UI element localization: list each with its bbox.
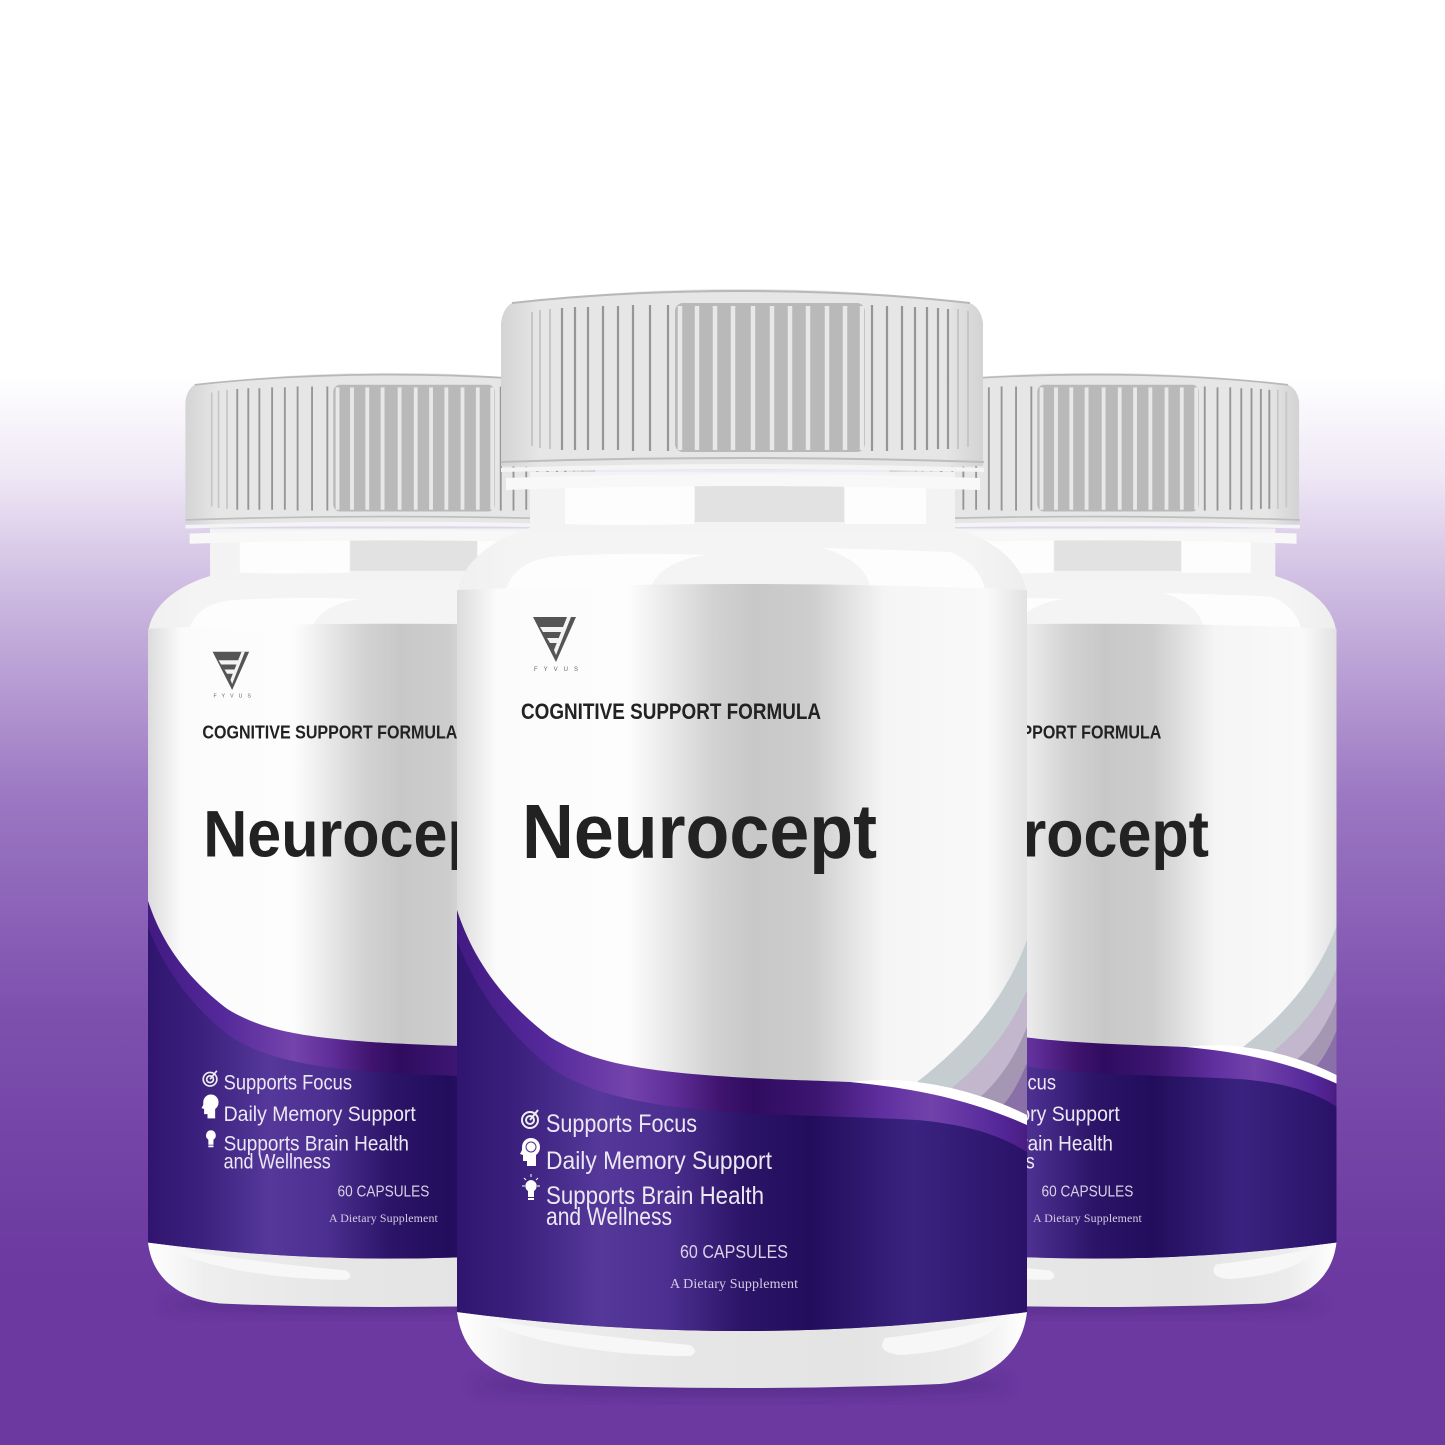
left subtitle: COGNITIVE SUPPORT FORMULA — [202, 721, 457, 742]
left shoulder highlight — [190, 593, 597, 628]
left benefits: and Wellness — [224, 1149, 331, 1173]
benefit: wellness: and Wellness — [546, 1203, 672, 1231]
icon: target — [522, 1110, 538, 1128]
left bottle label — [148, 624, 457, 1259]
right bottle neck — [894, 528, 1297, 579]
benefit: brain health: Supports Brain Health — [546, 1182, 764, 1210]
right capsule count: 60 CAPSULES — [1042, 1184, 1133, 1201]
right bottle — [852, 373, 1336, 1312]
center bottle base — [457, 1305, 1027, 1388]
white swoosh line — [852, 1080, 1027, 1125]
left benefits: Supports Focus — [224, 1070, 352, 1094]
right bottle cap — [889, 373, 1300, 528]
center bottle — [457, 289, 1027, 1394]
supplement note: A Dietary Supplement — [670, 1277, 798, 1292]
right bottle base — [852, 1236, 1336, 1307]
left supplement note: A Dietary Supplement — [329, 1211, 439, 1225]
right benefits: Supports Focus — [928, 1070, 1056, 1094]
brand logo: FYVUS — [534, 667, 578, 673]
center bottle neck — [506, 472, 980, 532]
left logo — [213, 652, 251, 700]
right benefits: Daily Memory Support — [928, 1102, 1120, 1126]
center bottle cap — [501, 289, 984, 472]
left benefits: Daily Memory Support — [224, 1102, 416, 1126]
corner wedge lilac — [952, 990, 1027, 1096]
corner wedge grey — [917, 940, 1027, 1088]
benefit: memory: Daily Memory Support — [546, 1147, 772, 1175]
right bottle label — [1027, 624, 1336, 1259]
center bottle shadow — [472, 1376, 1012, 1394]
center bottle body — [457, 528, 1027, 1312]
right product name: Neurocept — [907, 798, 1209, 871]
icon: head — [520, 1138, 540, 1166]
right benefits: Supports Brain Health — [928, 1132, 1113, 1156]
left bottle shadow — [161, 1297, 620, 1312]
dark purple panel — [457, 940, 1027, 1360]
purple band — [457, 910, 1027, 1360]
left bottle base — [148, 1236, 632, 1307]
center base highlights — [478, 1318, 1005, 1356]
capsule count: 60 CAPSULES — [680, 1242, 788, 1262]
left bottle — [148, 373, 632, 1312]
left bottle body — [148, 576, 632, 1242]
left benefit icons — [202, 1071, 219, 1147]
right base highlights — [870, 1248, 1318, 1280]
product name: Neurocept — [522, 789, 877, 875]
right bottle shadow — [865, 1297, 1324, 1312]
corner wedge mauve — [981, 1028, 1027, 1104]
subtitle: COGNITIVE SUPPORT FORMULA — [521, 699, 821, 724]
left logo: FYVUS — [213, 694, 251, 700]
center bottle label — [457, 575, 1027, 1360]
right subtitle: COGNITIVE SUPPORT FORMULA — [906, 721, 1161, 742]
infographic — [0, 289, 1445, 1445]
right supplement note: A Dietary Supplement — [1033, 1211, 1143, 1225]
brand logo — [533, 617, 578, 673]
corner wedge purple — [1004, 1064, 1027, 1115]
left bottle cap — [185, 373, 596, 528]
right benefits: and Wellness — [928, 1149, 1035, 1173]
left bottle neck — [190, 528, 593, 579]
icon: light bulb — [522, 1174, 540, 1200]
right shoulder highlight — [894, 593, 1301, 628]
right benefits — [928, 1070, 1120, 1174]
center shoulder highlight — [506, 548, 985, 589]
left benefits: Supports Brain Health — [224, 1132, 409, 1156]
right bottle body — [852, 576, 1336, 1242]
left product name: Neurocept — [203, 798, 505, 871]
left base highlights — [166, 1248, 614, 1280]
benefit: focus: Supports Focus — [546, 1110, 697, 1138]
left capsule count: 60 CAPSULES — [338, 1184, 429, 1201]
left benefits — [224, 1070, 416, 1174]
